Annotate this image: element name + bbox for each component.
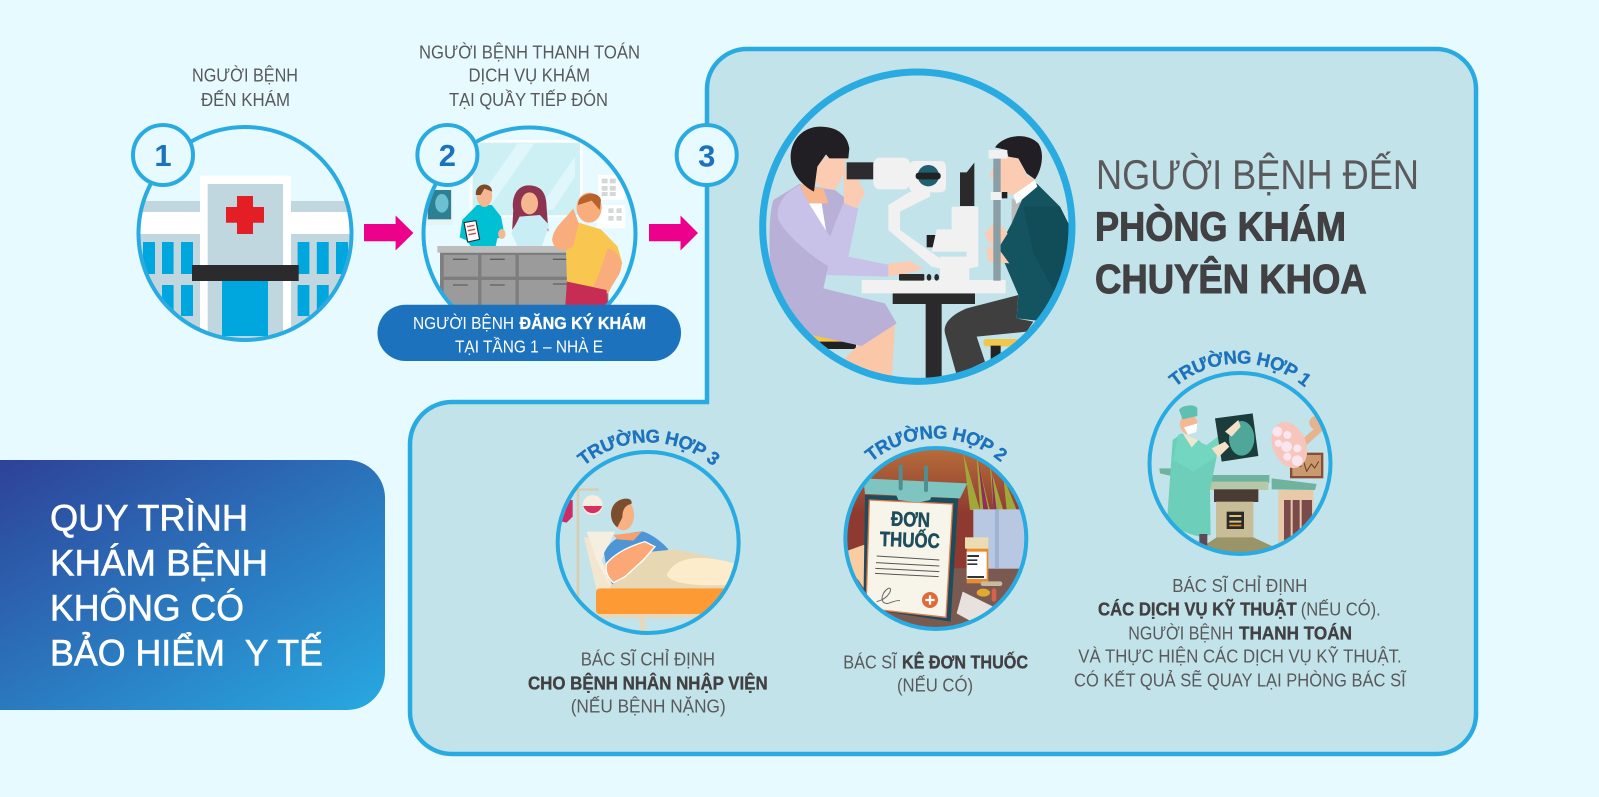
text: case 3 [528, 649, 768, 717]
title text [50, 498, 323, 674]
step 1 caption [192, 65, 298, 110]
doctor woman [769, 127, 923, 378]
text: case 1: NGƯỜI BỆNH [1128, 622, 1233, 643]
title text: QUY TRÌNH [50, 498, 248, 538]
panel: step 3 specialist clinic [410, 49, 1476, 754]
title text: BẢO HIỂM Y TẾ [50, 632, 323, 674]
prescription scene [843, 446, 1030, 632]
step 1 caption: NGƯỜI BỆNH [192, 65, 298, 86]
prescription title: THUỐC [879, 527, 940, 553]
step 2 caption: TẠI QUẦY TIẾP ĐÓN [449, 89, 608, 110]
step 2 caption [419, 41, 640, 110]
text: case 1: THANH TOÁN [1239, 622, 1352, 643]
title text: KHÔNG CÓ [50, 588, 244, 628]
icon: radiology circle [1149, 373, 1330, 557]
text: case 1: BÁC SĨ CHỈ ĐỊNH [1172, 575, 1307, 596]
text: case 3: BÁC SĨ CHỈ ĐỊNH [581, 649, 715, 670]
text: case 2: BÁC SĨ [843, 651, 898, 672]
heading: specialist clinic: NGƯỜI BỆNH ĐẾN [1096, 151, 1419, 198]
inpatient scene [562, 488, 734, 633]
curved label: case 1: TRƯỜNG HỢP 1 [1168, 350, 1310, 388]
text: case 2: (NẾU CÓ) [897, 675, 973, 696]
step 2 caption: NGƯỜI BỆNH THANH TOÁN [419, 41, 640, 62]
arrow: step 1 to 2 [364, 216, 413, 250]
badge 2: 2 [439, 138, 456, 173]
heading: specialist clinic: CHUYÊN KHOA [1095, 256, 1367, 302]
prescription title: ĐƠN [891, 508, 930, 532]
arrow: step 2 to 3 [649, 216, 698, 250]
text: case 1: CÓ KẾT QUẢ SẼ QUAY LẠI PHÒNG BÁC SĨ [1074, 670, 1407, 691]
badge 3 [677, 125, 737, 185]
icon: inpatient circle and prescription circle [558, 446, 1030, 633]
registration pill: TẠI TẦNG 1 – NHÀ E [455, 336, 603, 357]
step 1 caption: ĐẾN KHÁM [201, 89, 290, 110]
curved label: case 3: TRƯỜNG HỢP 3 [576, 430, 720, 465]
text: case 1: VÀ THỰC HIỆN CÁC DỊCH VỤ KỸ THUẬT. [1078, 646, 1402, 667]
curved label: case 2: TRƯỜNG HỢP 2 [864, 426, 1007, 462]
badge 3: 3 [698, 138, 715, 174]
text: case 1 [1074, 575, 1407, 691]
heading: specialist clinic [1095, 151, 1419, 302]
prescription title [880, 511, 940, 548]
icon: eye examination circle [763, 72, 1073, 381]
text: case 1: CÁC DỊCH VỤ KỸ THUẬT [1098, 598, 1297, 619]
icon: hospital circle [130, 126, 360, 346]
text: case 2 [843, 651, 1028, 696]
slit lamp [847, 158, 1006, 380]
badge 1 [133, 125, 193, 185]
text: case 2: KÊ ĐƠN THUỐC [902, 651, 1028, 672]
step 2 caption: DỊCH VỤ KHÁM [468, 66, 590, 86]
patient man [945, 136, 1073, 375]
text: case 3: CHO BỆNH NHÂN NHẬP VIỆN [528, 672, 768, 693]
registration pill [378, 305, 681, 361]
badge 1: 1 [154, 138, 172, 173]
icon: reception circle [422, 126, 638, 305]
text: case 3: (NẾU BỆNH NẶNG) [571, 696, 726, 717]
title text: KHÁM BỆNH [50, 542, 268, 584]
badge 2 [417, 125, 477, 185]
registration pill: NGƯỜI BỆNH [413, 312, 514, 333]
registration pill: ĐĂNG KÝ KHÁM [520, 312, 646, 333]
text: case 1: (NẾU CÓ). [1301, 598, 1381, 619]
heading: specialist clinic: PHÒNG KHÁM [1095, 204, 1346, 250]
title panel [0, 460, 385, 710]
